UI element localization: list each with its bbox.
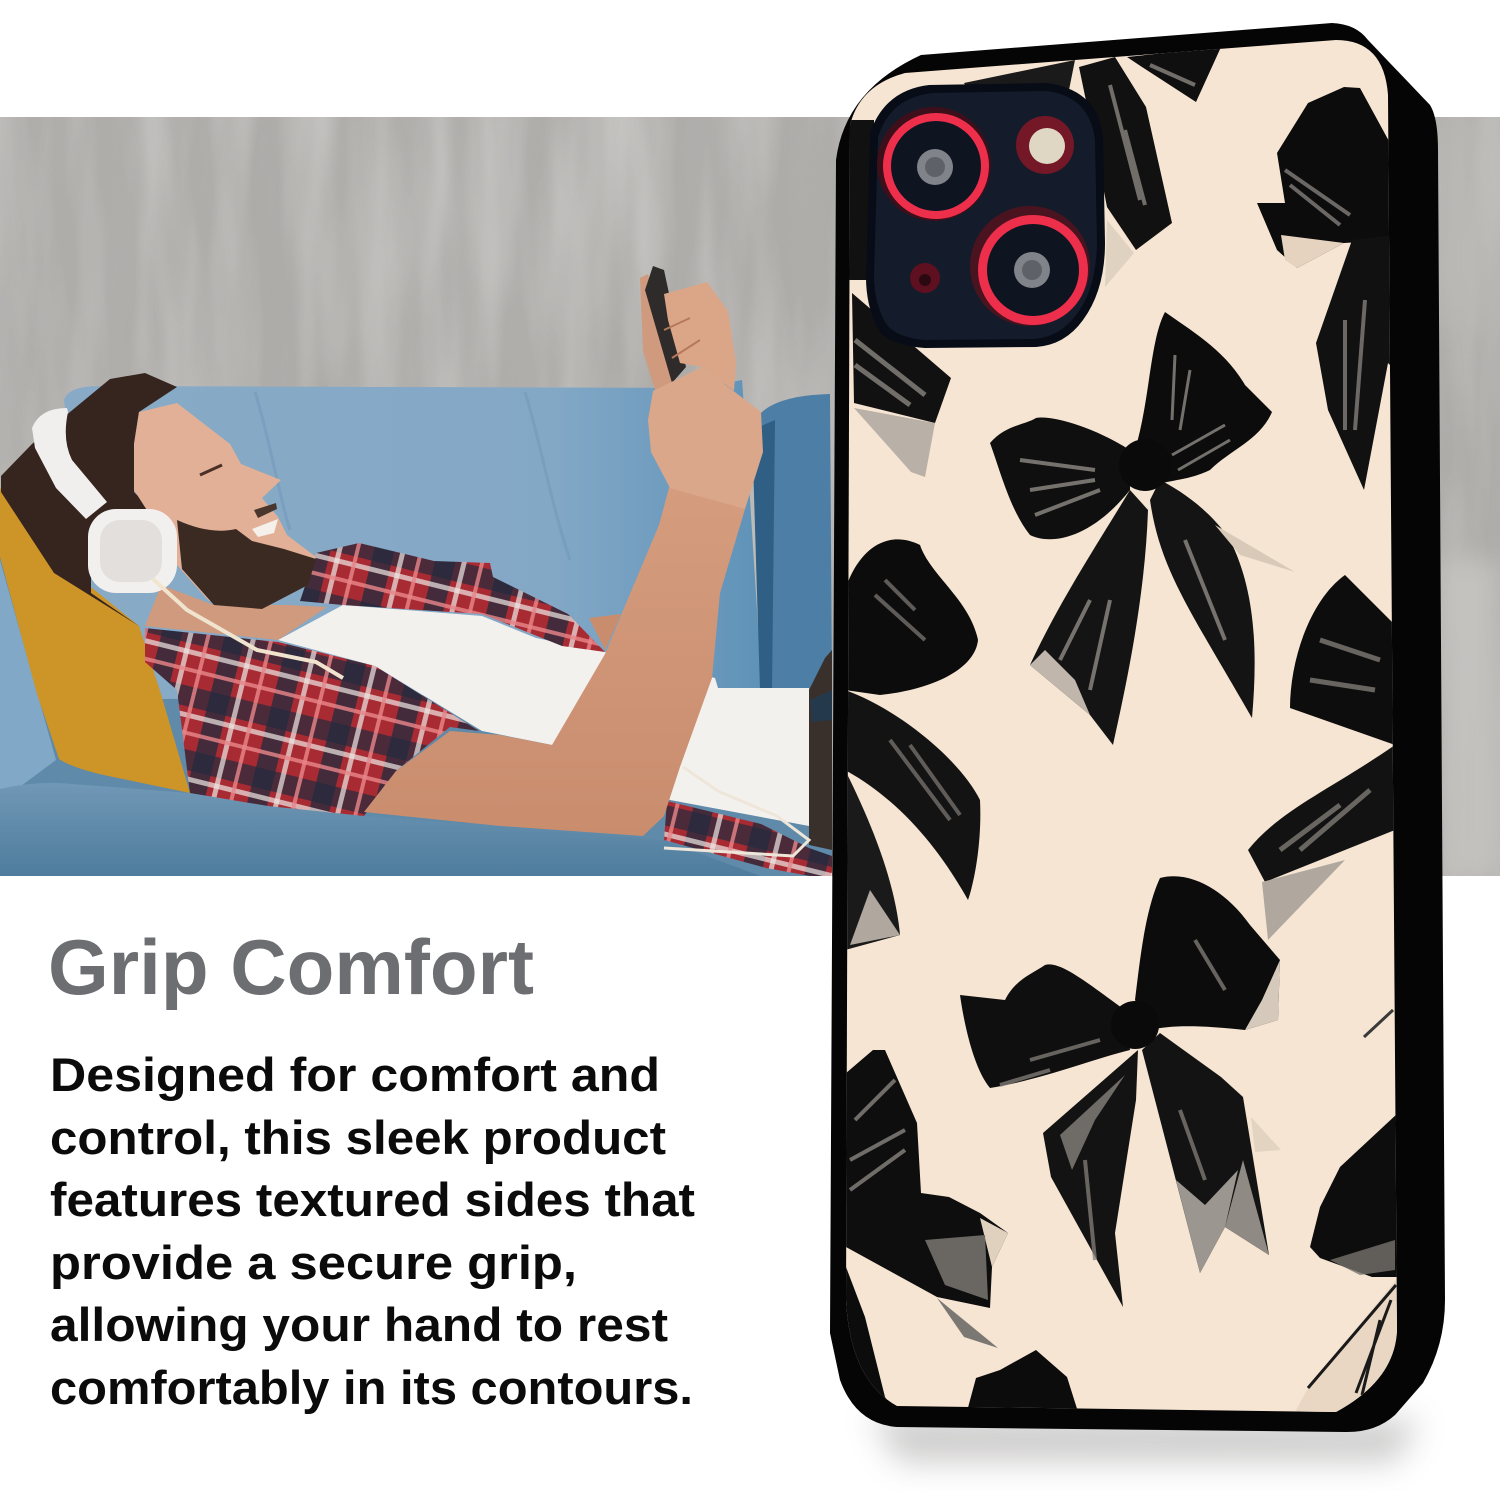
bow: bottom right: [1295, 1010, 1398, 1412]
sofa arm: [752, 394, 832, 690]
headphones: [32, 408, 809, 856]
bow: left lower: [846, 1050, 1008, 1412]
camera island: [866, 83, 1105, 348]
head: [1, 373, 327, 640]
bow: right middle: [1248, 575, 1395, 940]
neck: [145, 585, 327, 640]
beard: [177, 520, 316, 609]
body text: comfortably in its contours.: [50, 1361, 693, 1414]
hair: [1, 373, 177, 626]
yellow pillow: [0, 488, 190, 793]
wall background: [0, 117, 1500, 880]
main lens top: [877, 107, 991, 221]
bow: bottom: [968, 1350, 1077, 1408]
bow: left upper: [852, 293, 951, 477]
body text: control, this sleek product: [50, 1111, 666, 1164]
trousers: [809, 650, 832, 850]
phone case: [830, 23, 1445, 1462]
bow: top: [964, 47, 1221, 287]
plaid shirt: [145, 543, 832, 880]
moustache: [254, 503, 277, 518]
main lens bottom: [970, 206, 1090, 326]
sofa left cushion: [0, 560, 56, 792]
forearm and upper arm: [364, 484, 745, 836]
hand and phone: [640, 266, 763, 509]
bow: top right: [1257, 87, 1395, 490]
body text: Designed for comfort and: [50, 1048, 660, 1101]
heading: Grip Comfort: [48, 923, 534, 1011]
white shirt: [278, 605, 809, 826]
bow pattern: [845, 47, 1398, 1415]
flash: [1016, 116, 1074, 174]
photo: man on sofa: [0, 117, 1500, 880]
microphone: [910, 263, 940, 293]
sofa seat: [0, 783, 771, 880]
teeth: [252, 519, 278, 537]
body text: features textured sides that: [50, 1173, 695, 1226]
bow: left middle: [845, 539, 980, 950]
case printed back: [846, 40, 1397, 1412]
body text: provide a secure grip,: [50, 1236, 577, 1289]
bow: behind camera left edge: [850, 120, 874, 280]
sofa back: [64, 380, 762, 700]
sofa fold lines: [255, 392, 570, 560]
face: [134, 403, 316, 608]
sofa backing behind body: [0, 540, 832, 880]
arm behind: [589, 614, 621, 650]
bow: centre upper: [990, 312, 1295, 745]
eye: [200, 465, 222, 475]
body text: [50, 1048, 695, 1414]
case body: [830, 23, 1445, 1432]
bow: centre lower: [960, 876, 1281, 1307]
case shadow: [870, 1415, 1420, 1462]
body text: allowing your hand to rest: [50, 1298, 668, 1351]
